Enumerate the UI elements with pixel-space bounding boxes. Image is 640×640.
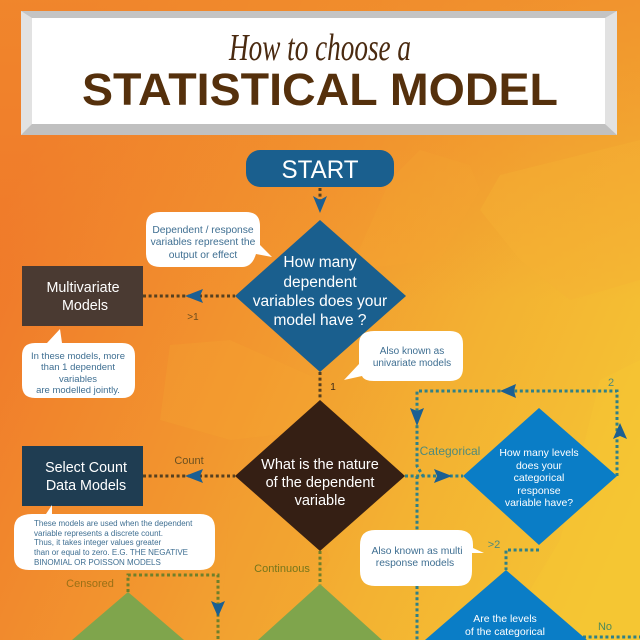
callout: multi response <box>360 530 484 586</box>
diamond: nature of dependent variable: What is the nature <box>261 457 379 473</box>
title: main line: STATISTICAL MODEL <box>82 64 558 115</box>
diamond: how many dependent variables: dependent <box>283 274 357 291</box>
diamond: nature of dependent variable: variable <box>295 493 345 509</box>
diamond: levels of categorical: categorical <box>514 472 564 484</box>
arrowheads <box>185 196 627 617</box>
diamond: continuous (green) <box>258 584 382 640</box>
box: multivariate models: Multivariate <box>46 280 120 296</box>
label: Censored: Censored <box>66 578 114 590</box>
label: >1: >1 <box>187 312 199 323</box>
connectors: teal <box>405 391 640 640</box>
callout: multivariate note: than 1 dependent <box>41 362 115 373</box>
diamond: censored (green) <box>72 592 184 640</box>
title: script line: How to choose a <box>228 27 411 69</box>
callout: count data note: variable represents a discrete count. <box>34 529 163 538</box>
diamond: how many dependent variables: variables does your <box>253 293 387 310</box>
diamond: levels of categorical: does your <box>516 460 563 472</box>
diamond: levels of categorical: How many levels <box>499 447 579 459</box>
connectors: green <box>128 551 320 640</box>
callout: count data note: than or equal to zero. E.G. THE NEGATIVE <box>34 548 188 557</box>
diamond: how many dependent variables <box>235 220 406 372</box>
callout: univariate: univariate models <box>373 358 451 369</box>
callout: multi response: response models <box>376 558 454 569</box>
diamond: are the levels <box>425 570 587 640</box>
box: select count data models: Data Models <box>46 478 126 494</box>
diamond: are the levels: of the categorical <box>465 626 545 638</box>
diamond: how many dependent variables: How many <box>283 254 357 271</box>
box: select count data models <box>22 446 143 506</box>
callout: dependent response <box>146 212 272 267</box>
diamond: levels of categorical <box>463 408 617 545</box>
label: 1: 1 <box>330 382 336 393</box>
callout: count data note: Thus, it takes integer values greater <box>34 538 162 547</box>
diamond: nature of dependent variable: of the dependent <box>266 475 374 491</box>
callout: multivariate note: variables <box>59 374 97 385</box>
diamond: are the levels: Are the levels <box>473 613 537 625</box>
diamond: nature of dependent variable <box>235 400 405 551</box>
callout: count data note <box>14 505 215 570</box>
callout: univariate <box>344 331 463 381</box>
callout: count data note: These models are used when the dependent <box>34 519 193 528</box>
box: multivariate models <box>22 266 143 326</box>
callout: dependent response: output or effect <box>169 250 237 261</box>
callout: multi response: Also known as multi <box>372 546 462 557</box>
label: Continuous: Continuous <box>254 563 310 575</box>
label: Count: Count <box>174 455 204 467</box>
diamond: how many dependent variables: model have ? <box>273 312 367 329</box>
label: 2: 2 <box>608 377 614 389</box>
label: No: No <box>598 621 612 633</box>
callout: multivariate note: In these models, more <box>31 351 125 362</box>
callout: count data note: BINOMIAL OR POISSON MODELS <box>34 558 161 567</box>
title banner <box>21 11 617 135</box>
callout: univariate: Also known as <box>380 346 444 357</box>
connectors: brown <box>143 188 320 476</box>
callout: multivariate note: are modelled jointly. <box>36 385 120 396</box>
callout: multivariate note <box>22 329 135 398</box>
box: select count data models: Select Count <box>45 460 127 476</box>
label: >2: >2 <box>488 539 500 551</box>
diamond: levels of categorical: response <box>517 485 561 497</box>
start button <box>246 150 394 187</box>
diamond: levels of categorical: variable have? <box>505 497 573 509</box>
box: multivariate models: Models <box>62 298 108 314</box>
callout: dependent response: Dependent / response <box>152 225 254 236</box>
start button: START <box>282 156 358 184</box>
callout: dependent response: variables represent the <box>151 237 256 248</box>
label: Categorical: Categorical <box>420 444 480 458</box>
